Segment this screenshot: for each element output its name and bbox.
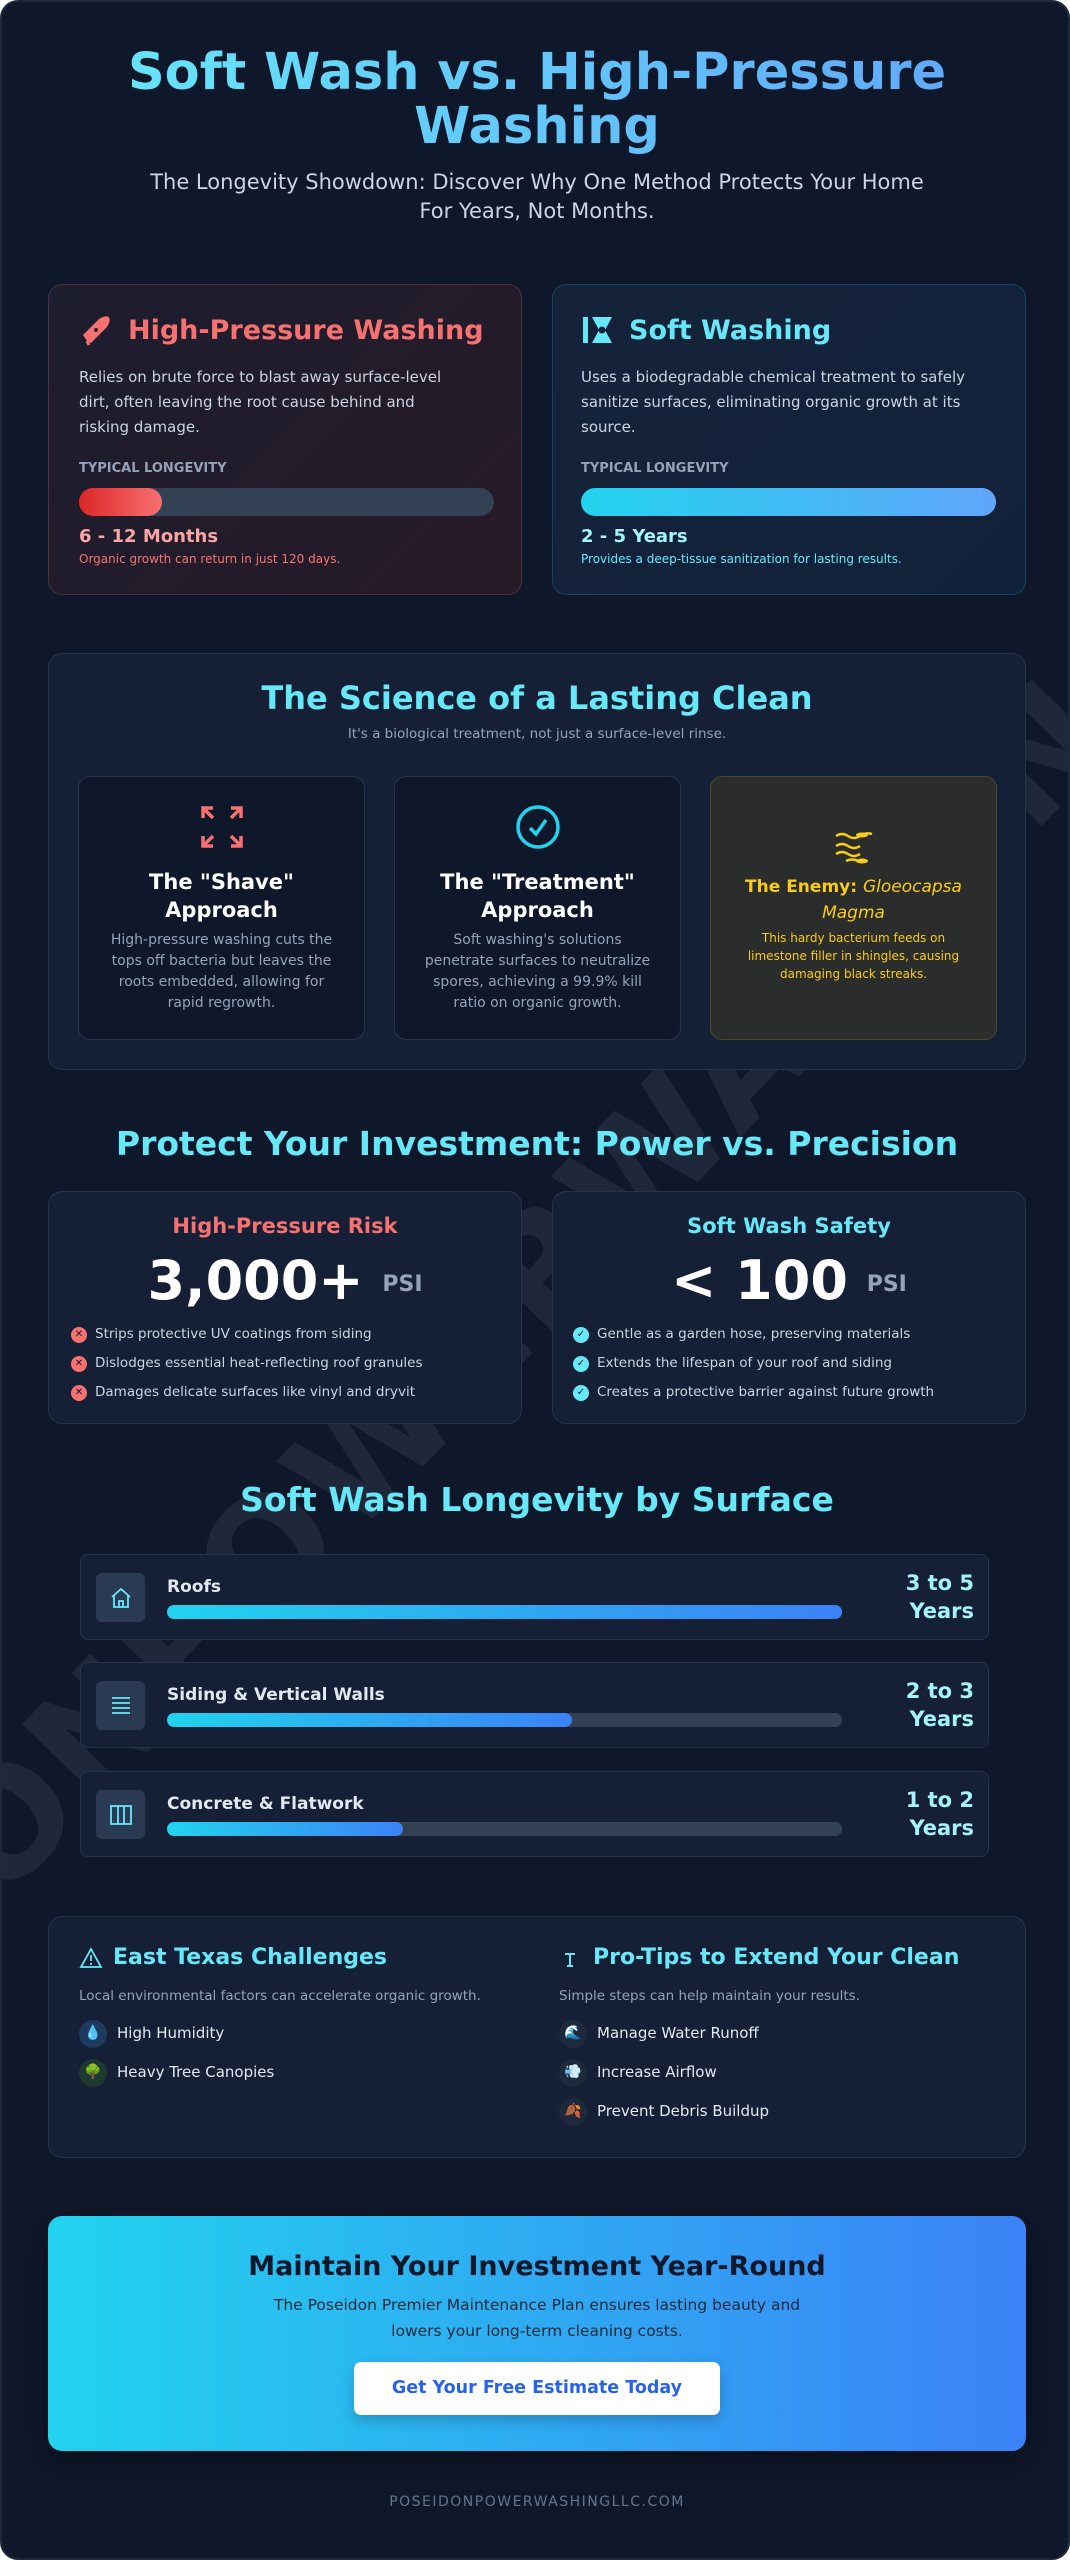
list: benefits: Gentle as a garden hose, preserving materials bbox=[597, 1326, 910, 1342]
column: pro-tips: Pro-Tips to Extend Your Clean bbox=[593, 1945, 959, 1970]
column: east texas challenges bbox=[79, 1945, 481, 2087]
card: treatment approach bbox=[394, 776, 681, 1040]
row: roofs bbox=[80, 1554, 989, 1640]
card: shave approach: Approach bbox=[165, 898, 278, 922]
icon: lines bbox=[96, 1681, 145, 1730]
value: 2 - 5 Years bbox=[581, 526, 688, 547]
text: cta bbox=[274, 2296, 800, 2340]
column: east texas challenges: High Humidity bbox=[117, 2024, 224, 2042]
value: 6 - 12 Months bbox=[79, 526, 218, 547]
list: risks: Damages delicate surfaces like vinyl and dryvit bbox=[95, 1384, 415, 1400]
row: concrete: 1 to 2 bbox=[906, 1788, 974, 1812]
list: benefits: ✓ bbox=[577, 1358, 585, 1369]
title: Soft Wash vs. High-Pressure bbox=[128, 43, 946, 102]
button bbox=[354, 2362, 720, 2415]
bar: 2-5 years bbox=[581, 488, 996, 516]
list: risks: Strips protective UV coatings from siding bbox=[95, 1326, 372, 1342]
column: pro-tips: 🌊 bbox=[564, 2025, 582, 2041]
row: concrete bbox=[80, 1771, 989, 1857]
list: benefits bbox=[573, 1326, 934, 1401]
subtitle bbox=[150, 170, 924, 223]
list: risks bbox=[71, 1326, 423, 1401]
label: TYPICAL LONGEVITY bbox=[581, 461, 729, 476]
panel: call to action bbox=[48, 2216, 1026, 2451]
list: risks: Dislodges essential heat-reflecting roof granules bbox=[95, 1355, 423, 1371]
heading: cta: Maintain Your Investment Year-Round bbox=[248, 2251, 826, 2282]
row: roofs: Roofs bbox=[167, 1577, 221, 1597]
list: benefits: ✓ bbox=[577, 1387, 585, 1398]
row: siding: Years bbox=[909, 1707, 974, 1731]
list: benefits: ✓ bbox=[577, 1329, 585, 1340]
icon: columns bbox=[96, 1790, 145, 1839]
icon: expand arrows bbox=[201, 806, 243, 848]
column: pro-tips: 💨 bbox=[564, 2064, 582, 2080]
card: shave approach: High-pressure washing cuts the tops off bacteria but leaves the roots embedded, allowing for rapid regrowth. bbox=[111, 932, 332, 1011]
row: roofs: 3 to 5 bbox=[906, 1571, 974, 1595]
row: siding: Siding & Vertical Walls bbox=[167, 1685, 385, 1705]
subheading: science: It's a biological treatment, not just a surface-level rinse. bbox=[348, 726, 726, 742]
note: Provides a deep-tissue sanitization for lasting results. bbox=[581, 552, 902, 566]
title: Washing bbox=[414, 97, 660, 156]
row: siding: 2 to 3 bbox=[906, 1679, 974, 1703]
list: benefits: Creates a protective barrier against future growth bbox=[597, 1384, 934, 1400]
row: concrete: Years bbox=[909, 1816, 974, 1840]
panel: challenges and tips bbox=[48, 1916, 1026, 2158]
column: east texas challenges: 🌳 bbox=[84, 2064, 102, 2080]
stat: <100 psi: < 100 PSI bbox=[671, 1249, 907, 1312]
title bbox=[62, 46, 1012, 154]
card: enemy: This hardy bacterium feeds on limestone filler in shingles, causing damaging black streaks. bbox=[748, 931, 959, 981]
card: treatment approach: Approach bbox=[481, 898, 594, 922]
card: treatment approach: The "Treatment" bbox=[440, 870, 635, 894]
column: pro-tips: Simple steps can help maintain your results. bbox=[559, 1988, 860, 2004]
column: pro-tips: 🍂 bbox=[564, 2103, 582, 2119]
heading: science: The Science of a Lasting Clean bbox=[261, 679, 813, 717]
row: siding bbox=[80, 1662, 989, 1748]
footer: POSEIDONPOWERWASHINGLLC.COM bbox=[389, 2494, 685, 2510]
list: risks: ✕ bbox=[75, 1358, 83, 1369]
label: TYPICAL LONGEVITY bbox=[79, 461, 227, 476]
heading: soft washing: Soft Washing bbox=[629, 314, 831, 346]
bar: 6-12 months bbox=[79, 488, 494, 516]
column: east texas challenges: 💧 bbox=[84, 2025, 102, 2041]
panel: science bbox=[48, 653, 1026, 1070]
column: east texas challenges: East Texas Challenges bbox=[113, 1945, 387, 1970]
icon: house bbox=[96, 1573, 145, 1622]
panel: high-pressure washing bbox=[48, 284, 522, 595]
card: enemy bbox=[710, 776, 997, 1040]
text: cta: The Poseidon Premier Maintenance Plan ensures lasting beauty and bbox=[274, 2296, 800, 2314]
list: risks: ✕ bbox=[75, 1387, 83, 1398]
row: concrete: Concrete & Flatwork bbox=[167, 1794, 364, 1814]
column: pro-tips bbox=[559, 1945, 959, 2126]
card: shave approach bbox=[78, 776, 365, 1040]
text: description: Relies on brute force to blast away surface-level dirt, often leaving the root cause behind and risking damage. bbox=[79, 368, 441, 436]
heading: high-pressure: High-Pressure Washing bbox=[128, 314, 484, 346]
heading: Soft Wash Safety bbox=[687, 1214, 891, 1238]
column: pro-tips: Manage Water Runoff bbox=[597, 2024, 759, 2042]
stat: 3000+ psi: 3,000+ PSI bbox=[147, 1249, 422, 1312]
icon: bacteria bbox=[835, 832, 872, 864]
row: roofs: Years bbox=[909, 1599, 974, 1623]
note: Organic growth can return in just 120 days. bbox=[79, 552, 340, 566]
column: pro-tips: Prevent Debris Buildup bbox=[597, 2102, 769, 2120]
panel: soft wash safety bbox=[552, 1191, 1026, 1424]
button: Get Your Free Estimate Today bbox=[392, 2378, 682, 2398]
heading: protect your investment: Protect Your Investment: Power vs. Precision bbox=[116, 1124, 958, 1163]
subtitle: The Longevity Showdown: Discover Why One Method Protects Your Home bbox=[150, 170, 924, 194]
column: east texas challenges: Heavy Tree Canopies bbox=[117, 2063, 274, 2081]
heading: longevity by surface: Soft Wash Longevity by Surface bbox=[240, 1480, 834, 1519]
card: shave approach: The "Shave" bbox=[149, 870, 294, 894]
heading: High-Pressure Risk bbox=[172, 1214, 398, 1238]
card: treatment approach: Soft washing's solutions penetrate surfaces to neutralize spores, achieving a 99.9% kill ratio on organic growth. bbox=[425, 932, 650, 1011]
text: description: Uses a biodegradable chemical treatment to safely sanitize surfaces, eliminating organic growth at its source. bbox=[581, 368, 965, 436]
column: pro-tips: Increase Airflow bbox=[597, 2063, 717, 2081]
text: cta: lowers your long-term cleaning costs. bbox=[391, 2322, 683, 2340]
panel: high-pressure risk bbox=[48, 1191, 522, 1424]
list: risks: ✕ bbox=[75, 1329, 83, 1340]
card: enemy: The Enemy: Gloeocapsa Magma bbox=[745, 877, 962, 923]
subtitle: For Years, Not Months. bbox=[419, 199, 655, 223]
list: benefits: Extends the lifespan of your roof and siding bbox=[597, 1355, 892, 1371]
column: east texas challenges: Local environmental factors can accelerate organic growth. bbox=[79, 1988, 481, 2004]
icon: check circle bbox=[516, 805, 560, 849]
panel: soft washing bbox=[552, 284, 1026, 595]
